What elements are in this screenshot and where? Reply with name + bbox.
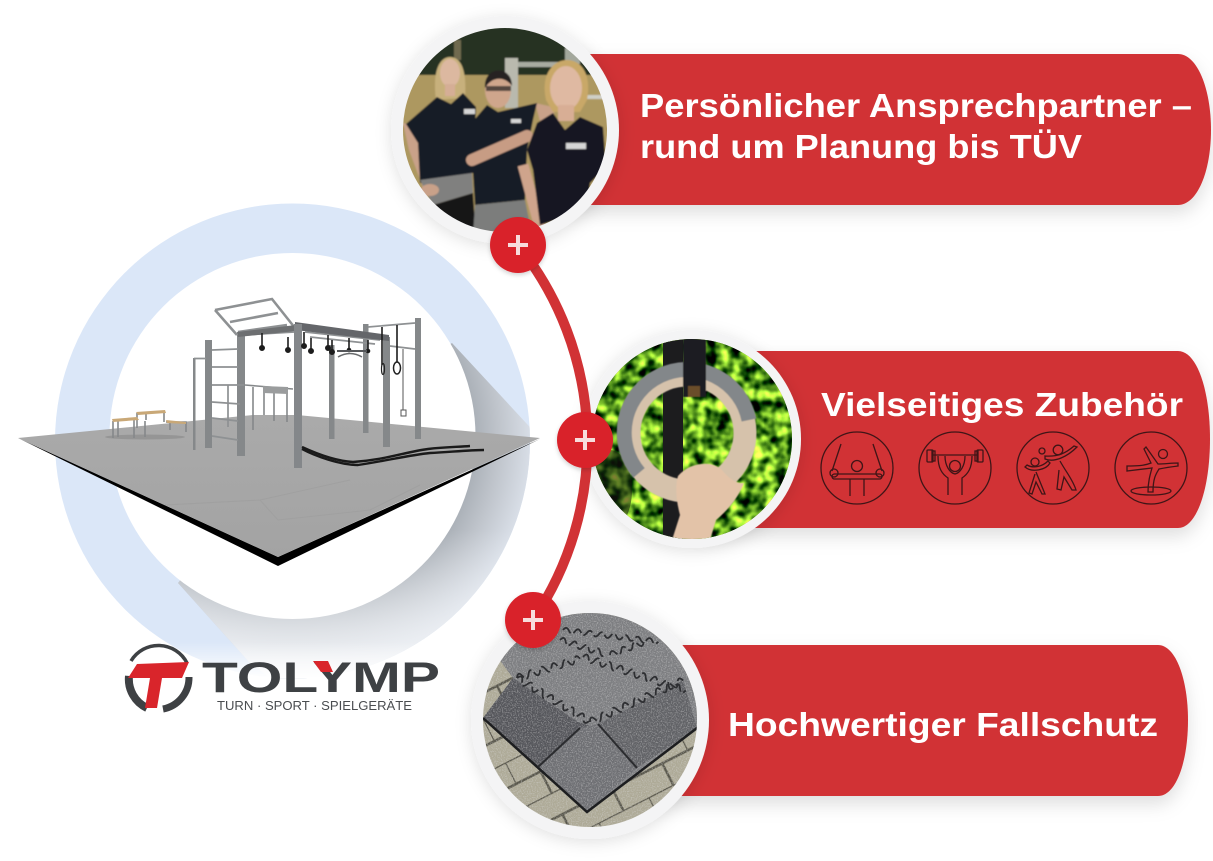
icon: balance figure	[1115, 432, 1187, 504]
panel text: Ansprechpartner	[640, 87, 1192, 165]
photo circle: rubber mat	[470, 590, 720, 839]
panel text: Ansprechpartner: Persönlicher Ansprechpartner –	[640, 87, 1192, 124]
right woman	[523, 165, 540, 228]
photo circle: gymnastic ring	[583, 330, 801, 548]
left woman	[403, 122, 423, 186]
plus button: middle	[557, 412, 613, 468]
logo mark	[128, 645, 189, 709]
table station	[245, 385, 293, 430]
hanging straps	[260, 325, 397, 365]
battle ropes	[302, 446, 484, 465]
blue ring with long shadow	[55, 204, 530, 678]
man	[535, 103, 555, 121]
steel frame	[193, 299, 421, 468]
panel text: Fallschutz: Hochwertiger Fallschutz	[728, 706, 1158, 743]
icon: rings athlete	[821, 432, 893, 504]
outdoor gym illustration	[18, 299, 540, 566]
photo circle: team	[391, 16, 619, 244]
panel: persönlicher Ansprechpartner	[560, 54, 1211, 205]
logo: Tolymp	[128, 645, 440, 713]
panel text: Ansprechpartner: rund um Planung bis TÜV	[640, 128, 1082, 165]
logo wordmark: TOLYMP	[202, 654, 440, 702]
plus button: top	[490, 217, 546, 273]
panel: vielseitiges Zubehör	[700, 351, 1210, 528]
rungs and bars	[194, 299, 415, 440]
bench steps	[105, 410, 186, 440]
plus button: bottom	[505, 592, 561, 648]
logo tagline: TURN · SPORT · SPIELGERÄTE	[217, 699, 412, 713]
icon: weightlifter	[919, 432, 991, 504]
panel: hochwertiger Fallschutz	[650, 645, 1188, 796]
icon: family figures	[1017, 432, 1089, 504]
rubber floor	[18, 415, 540, 566]
connector arc	[518, 245, 587, 620]
rear posts	[193, 318, 421, 456]
panel heading: Zubehör: Vielseitiges Zubehör	[821, 386, 1183, 423]
puzzle seams	[515, 628, 687, 725]
